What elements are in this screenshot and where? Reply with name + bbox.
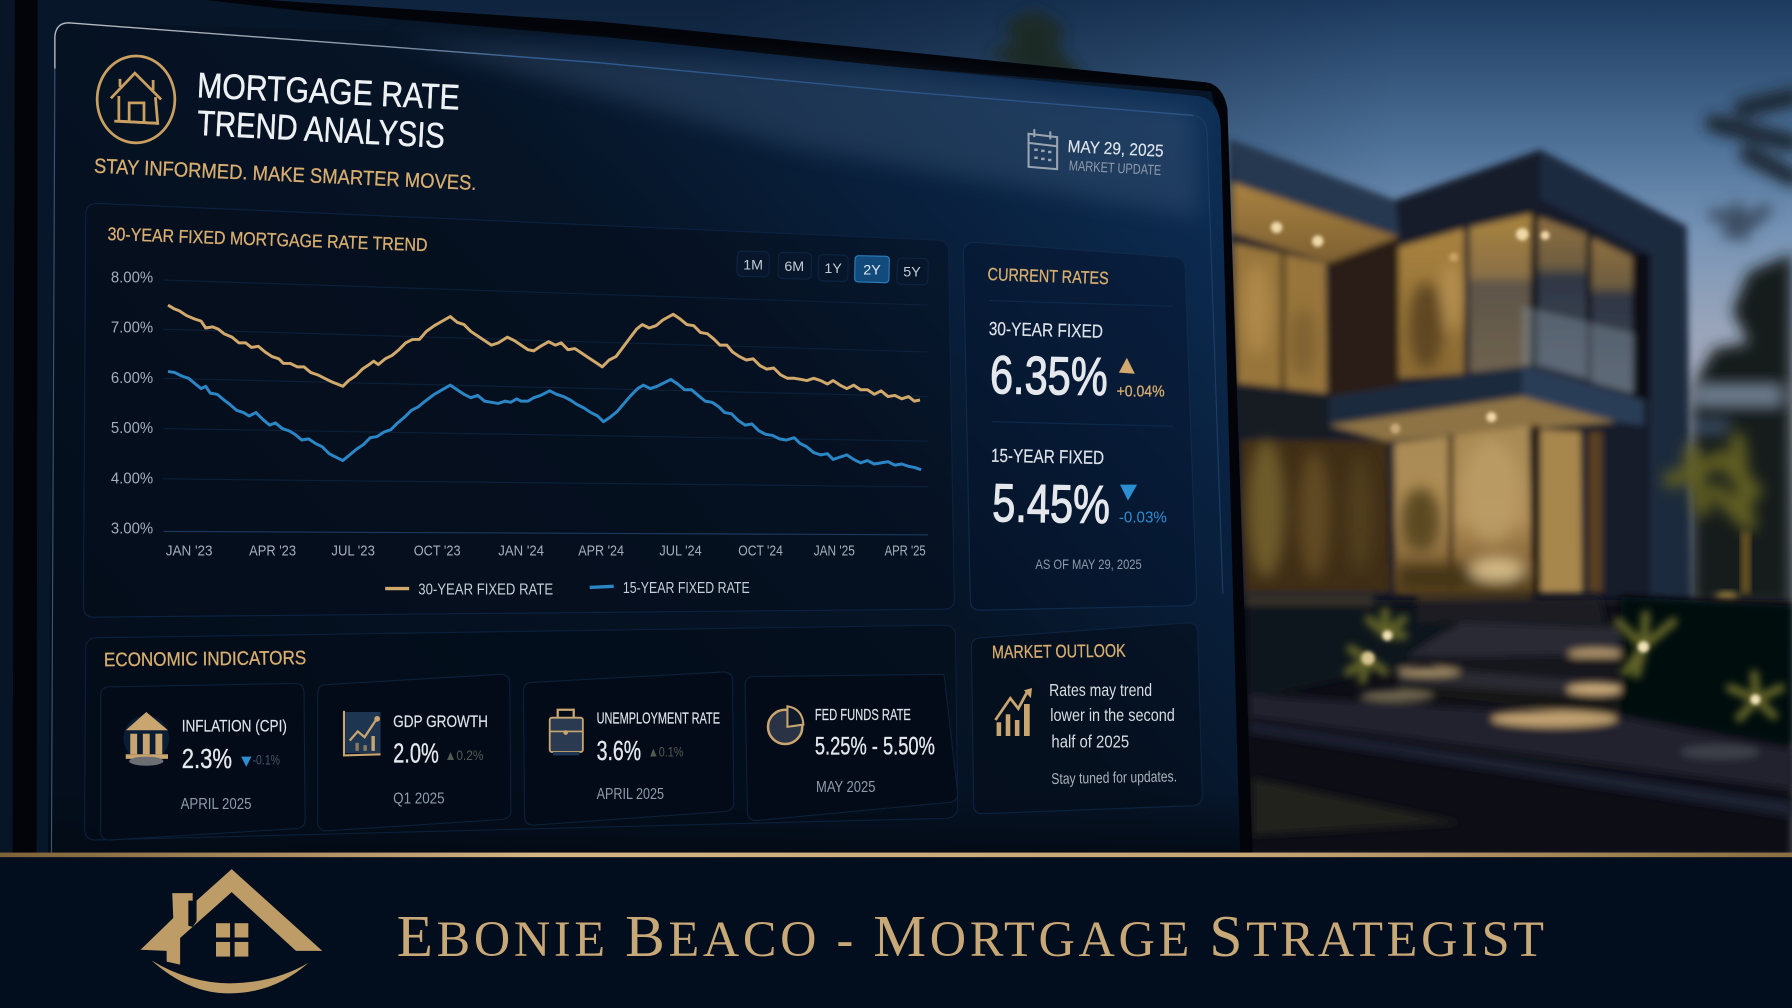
x axis labels: [166, 543, 926, 559]
range selector: 5Y: [903, 265, 921, 281]
tagline: STAY INFORMED. MAKE SMARTER MOVES.: [93, 155, 477, 195]
panel: current rates: [963, 242, 1197, 610]
icon: growth chart: [344, 711, 381, 755]
house interior glow details: [1243, 263, 1529, 592]
background: distant trees: [989, 9, 1792, 606]
outlook text: lower in the second: [1050, 705, 1175, 725]
card: unemployment: 3.6%: [597, 735, 641, 766]
x axis labels: JUL '24: [659, 543, 702, 559]
card: GDP growth: ▲0.2%: [445, 748, 483, 763]
line: 30-year rate: [168, 305, 920, 401]
30-year rate: +0.04%: [1117, 384, 1165, 401]
30-year rate: 30-YEAR FIXED: [988, 318, 1103, 342]
15-year rate: [991, 445, 1167, 535]
title: [196, 65, 461, 156]
y axis labels: 8.00%: [111, 269, 153, 286]
monitor screen: [48, 23, 1240, 857]
bushes with garden lights: [1349, 611, 1781, 718]
footer band: [0, 853, 1792, 1008]
15-year rate: -0.03%: [1119, 509, 1167, 526]
x axis labels: OCT '24: [738, 543, 783, 559]
chart heading: 30-YEAR FIXED MORTGAGE RATE TREND: [107, 223, 428, 255]
x axis labels: APR '23: [249, 543, 296, 559]
y axis labels: 7.00%: [111, 320, 153, 337]
card: inflation: -0.1%: [253, 753, 280, 768]
screen edge highlight: [1193, 115, 1223, 594]
card: inflation: APRIL 2025: [181, 796, 252, 813]
30-year rate: 6.35%: [990, 345, 1108, 407]
legend: 15-YEAR FIXED RATE: [623, 580, 750, 597]
header: house logo: [97, 56, 175, 143]
legend: [385, 580, 750, 598]
tree with uplight: [1671, 440, 1754, 603]
card: fed funds: [745, 674, 958, 821]
y axis labels: 6.00%: [111, 370, 153, 387]
panel: economic indicators: [85, 625, 958, 840]
x axis labels: JAN '23: [166, 543, 213, 559]
icon: briefcase: [550, 710, 583, 755]
range selector: 1Y: [824, 261, 842, 277]
y axis labels: 3.00%: [111, 521, 153, 538]
card: fed funds: FED FUNDS RATE: [815, 707, 911, 724]
panel: market outlook: Stay tuned for updates.: [1051, 768, 1177, 788]
card: unemployment: ▲0.1%: [648, 745, 683, 760]
x axis labels: JUL '23: [331, 543, 375, 559]
card: inflation: [101, 683, 305, 840]
background: blurred modern house: [1230, 139, 1691, 606]
range selector: 6M: [784, 259, 804, 275]
gold rule: [0, 853, 1792, 857]
heading: CURRENT RATES: [987, 264, 1109, 288]
icon: growth arrow: [995, 688, 1032, 736]
card: GDP growth: [318, 674, 511, 831]
outlook text: [1049, 680, 1175, 751]
15-year rate: 5.45%: [992, 473, 1111, 535]
x axis labels: JAN '25: [814, 543, 855, 559]
legend: 30-YEAR FIXED RATE: [418, 581, 553, 598]
title: TREND ANALYSIS: [196, 103, 446, 156]
line: 15-year rate: [168, 371, 921, 470]
name: EBONIE BEACO - MORTGAGE STRATEGIST: [397, 903, 1544, 969]
panel: chart: [83, 203, 954, 617]
icon: pie chart: [768, 706, 803, 744]
date text: MAY 29, 2025: [1067, 136, 1164, 161]
outlook text: half of 2025: [1051, 731, 1129, 751]
y axis labels: 4.00%: [111, 470, 153, 487]
icon: calendar: [1029, 129, 1057, 169]
as-of note: AS OF MAY 29, 2025: [1035, 557, 1142, 573]
outlook text: Rates may trend: [1049, 680, 1152, 700]
screen sheen: [389, 37, 1200, 217]
card: unemployment: [523, 672, 734, 825]
card: inflation: INFLATION (CPI): [182, 716, 287, 735]
market update label: MARKET UPDATE: [1068, 158, 1162, 179]
range selector: [737, 251, 928, 285]
card: GDP growth: GDP GROWTH: [393, 712, 488, 731]
icon: bank: [123, 712, 169, 766]
y axis labels: 5.00%: [111, 420, 153, 437]
x axis labels: APR '25: [885, 543, 926, 559]
monitor bezel: [0, 0, 1253, 857]
card: fed funds: MAY 2025: [816, 779, 875, 796]
date block: [1029, 129, 1164, 179]
x axis labels: OCT '23: [414, 543, 461, 559]
range selector: 2Y: [863, 262, 881, 278]
card: GDP growth: 2.0%: [393, 737, 439, 768]
card: GDP growth: Q1 2025: [393, 790, 445, 807]
panel: market outlook: [971, 623, 1202, 814]
range selector: 1M: [743, 258, 763, 274]
heading: ECONOMIC INDICATORS: [104, 647, 306, 671]
title: MORTGAGE RATE: [196, 65, 461, 118]
15-year rate: 15-YEAR FIXED: [991, 445, 1104, 468]
logo: house: [141, 869, 322, 993]
card: fed funds: 5.25% - 5.50%: [815, 732, 935, 760]
ground: steps and walkway: [1234, 592, 1792, 857]
card: inflation: 2.3%: [182, 743, 232, 774]
30-year rate: [988, 318, 1165, 407]
x axis labels: JAN '24: [498, 543, 544, 559]
card: unemployment: UNEMPLOYMENT RATE: [597, 710, 720, 727]
card: unemployment: APRIL 2025: [597, 786, 664, 803]
x axis labels: APR '24: [578, 543, 624, 559]
y axis labels: [111, 269, 153, 538]
heading: MARKET OUTLOOK: [992, 640, 1126, 662]
house lights: [1271, 222, 1550, 434]
